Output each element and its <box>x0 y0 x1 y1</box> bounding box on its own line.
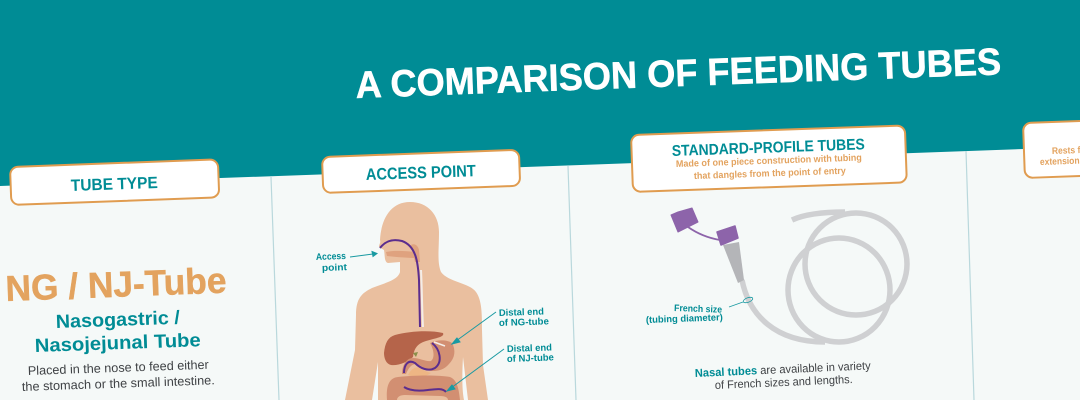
throat <box>386 244 420 262</box>
purple hub <box>717 226 738 245</box>
label: distal end of NJ-tube <box>507 342 554 365</box>
tube description <box>22 358 215 394</box>
stomach <box>402 340 454 374</box>
card: standard-profile heading: STANDARD-PROFILE TUBES <box>672 136 865 160</box>
card: standard-profile heading: that dangles from the point of entry <box>694 166 847 182</box>
purple cap <box>671 208 698 232</box>
feeding tube: NJ path <box>404 387 446 392</box>
label: distal end of NG-tube <box>499 306 549 329</box>
illustration: nasal tube <box>671 208 907 342</box>
label: distal end of NG-tube: of NG-tube <box>499 316 549 329</box>
intestine gap <box>397 395 448 400</box>
label: access point: Access <box>316 251 346 263</box>
tube description: Placed in the nose to feed either <box>28 358 209 378</box>
coiled tubing <box>742 212 907 342</box>
arrow: access point <box>350 252 377 257</box>
nasal tube description: of French sizes and lengths. <box>715 374 853 392</box>
header band <box>0 0 1080 186</box>
tube description: the stomach or the small intestine. <box>22 373 215 394</box>
tube full name <box>34 308 201 357</box>
tapered connector <box>723 242 744 283</box>
card: standard-profile heading <box>631 125 907 192</box>
label: access point <box>316 251 348 274</box>
anatomy illustration <box>345 202 488 400</box>
intestines <box>387 376 460 400</box>
nasal tube description: Nasal tubes are available in variety <box>695 360 871 380</box>
tube full name: Nasogastric / <box>55 308 181 333</box>
tube full name: Nasojejunal Tube <box>34 330 201 357</box>
card: access point heading <box>322 150 520 193</box>
pancreas <box>408 367 431 377</box>
feeding tube: NG path <box>380 240 420 327</box>
label: french size <box>646 303 723 326</box>
tube name: NG / NJ-Tube <box>5 260 227 309</box>
arrow: NJ-tube <box>447 349 504 391</box>
card: standard-profile heading: Made of one piece construction with tubing <box>676 153 862 170</box>
card: access point heading: ACCESS POINT <box>366 162 476 184</box>
card: tube type heading: TUBE TYPE <box>71 174 158 195</box>
panel: tube type <box>5 159 227 394</box>
liver <box>384 331 443 365</box>
label: distal end of NJ-tube: Distal end <box>507 342 552 355</box>
panel: standard-profile tubes <box>631 125 907 392</box>
gallbladder <box>413 352 418 357</box>
label: distal end of NJ-tube: of NJ-tube <box>507 352 554 365</box>
label: distal end of NG-tube: Distal end <box>499 306 544 319</box>
panel: access point <box>316 150 554 400</box>
strap <box>688 227 720 240</box>
callout: french size marker <box>729 296 753 307</box>
label: french size: French size <box>674 303 722 316</box>
body silhouette <box>345 202 488 400</box>
label: access point: point <box>322 262 348 274</box>
card: tube type heading <box>10 159 219 205</box>
card: low-profile tubes (cropped) <box>1023 120 1080 178</box>
label: french size: (tubing diameter) <box>646 312 723 326</box>
nasal tube description <box>695 360 871 392</box>
title: A COMPARISON OF FEEDING TUBES <box>355 41 1002 107</box>
arrow: NG-tube <box>452 312 496 344</box>
feeding tube: white liner <box>421 270 423 327</box>
